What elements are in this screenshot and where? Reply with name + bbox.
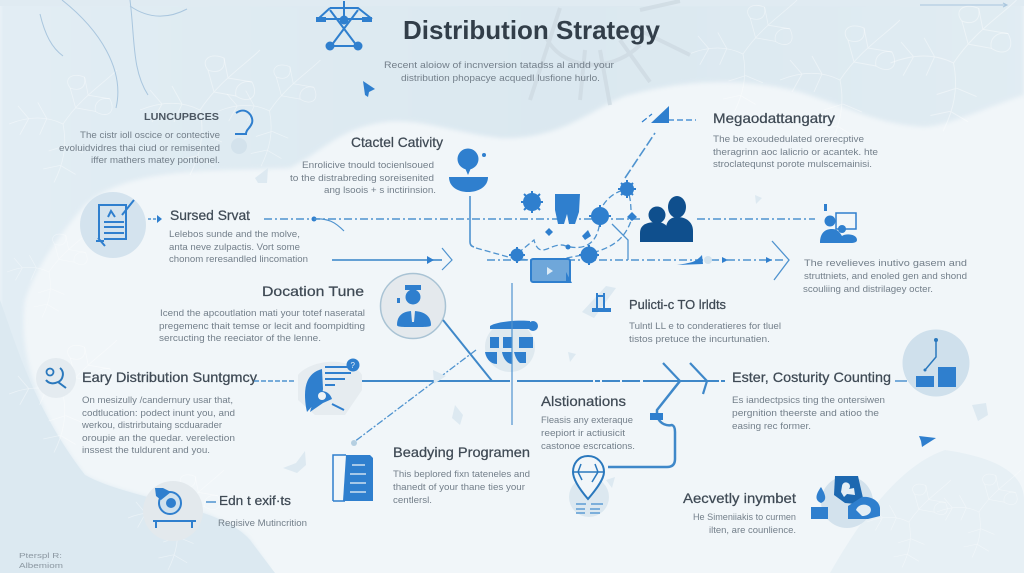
panel: Edn texifts: Regisive Mutincrition xyxy=(218,518,307,529)
panel: Alstionations: castonoe escrcations. xyxy=(541,441,635,452)
panel: Ester costurity: easing rec former. xyxy=(732,421,811,432)
icon: question mark xyxy=(231,111,252,154)
panel: Luncupbces xyxy=(59,111,220,166)
panel: revelieves: The revelieves inutivo gasem and xyxy=(804,258,967,269)
panel: revelieves: struttniets, and enoled gen and shond xyxy=(804,271,967,282)
icon: document folder xyxy=(333,455,373,501)
cluster: connected network nodes xyxy=(476,133,655,265)
connector: main horizontal line xyxy=(254,283,725,425)
panel: revelieves xyxy=(803,258,967,295)
icon: camera gear xyxy=(143,481,203,541)
panel: Docation Tune: Icend the apcoutlation mati your totef naseratal xyxy=(160,308,365,319)
panel: Beadying Programen: Beadying Programen xyxy=(393,444,530,460)
intro text: Recent aloiow of incnversion tatadss al andd your xyxy=(384,60,614,71)
panel: Early distribution: inssest the tuldurent and you. xyxy=(82,445,210,456)
panel: Pulicti-c: Pulicti-c TO lrldts xyxy=(629,297,726,312)
panel: Megaodattangatry: stroclatequnst porote mulscemainisi. xyxy=(713,159,872,170)
panel: Beadying Programen: centlersl. xyxy=(393,495,432,506)
panel: Docation Tune: Docation Tune xyxy=(262,283,364,299)
panel: Sursed Srvat: anta neve zulpactis. Vort some xyxy=(169,242,300,253)
icon: network emblem xyxy=(316,1,372,50)
panel: Ester costurity: Es iandectpsics ting the ontersiwen xyxy=(732,395,885,406)
panel: Aecvetly inymbet: He Simeniiakis to curmen xyxy=(693,512,796,523)
panel: Sursed Srvat: Lelebos sunde and the molve, xyxy=(169,229,300,240)
icon: video card xyxy=(531,259,572,283)
panel: Luncupbces: iffer mathers matey pontionel. xyxy=(91,155,220,166)
faded virus emblem behind title xyxy=(530,1,690,105)
panel: Edn texifts xyxy=(206,493,307,529)
panel: Ctactel Cativity: ang lsoois + s inctirinsion. xyxy=(324,185,436,196)
panel: revelieves: scouliing and distrilagey octer. xyxy=(803,284,933,295)
panel: Alstionations xyxy=(541,393,635,452)
panel: Luncupbces: LUNCUPBCES xyxy=(144,111,219,123)
icon: team with screen xyxy=(820,204,857,243)
panel: Aecvetly inymbet xyxy=(683,490,796,536)
panel: Ester costurity: pergnition theerste and atioo the xyxy=(732,408,879,419)
icon: ascending triangle xyxy=(642,106,696,123)
panel: Aecvetly inymbet: Aecvetly inymbet xyxy=(683,490,796,506)
icon: person pin xyxy=(449,148,488,247)
panel: Megaodattangatry: Megaodattangatry xyxy=(713,110,835,126)
small floating shapes xyxy=(255,168,988,488)
panel: Ctactel Cativity xyxy=(290,134,443,196)
footer note: Pterspl R: xyxy=(19,553,62,560)
panel: Sursed Srvat: Sursed Srvat xyxy=(170,207,250,223)
panel: Megaodattangatry xyxy=(713,110,878,170)
icon: location pin xyxy=(569,456,609,517)
panel: Ester costurity: Ester, Costurity Counting xyxy=(732,369,891,385)
panel: Pulicti-c: Tulntl LL e to conderatieres for tluel xyxy=(629,321,781,332)
panel: Sursed Srvat: chonom reresandled lincomation xyxy=(169,254,308,265)
panel: Alstionations: reepiort ir actiusicit xyxy=(541,428,625,439)
connector: portrait to main line xyxy=(443,320,492,381)
panel: Alstionations: Fleasis any exteraque xyxy=(541,415,633,426)
icon: document with pen xyxy=(80,192,146,258)
icon: table card xyxy=(485,321,538,372)
panel: Early distribution: On mesizully /candernury usar that, xyxy=(82,395,233,406)
icon: magnifier xyxy=(36,358,76,398)
panel: Sursed Srvat xyxy=(169,207,308,265)
panel: Early distribution xyxy=(81,369,257,456)
panel: Docation Tune xyxy=(159,283,365,344)
connector: upper dashed line xyxy=(264,216,815,231)
icon: speech note: ? xyxy=(350,361,356,370)
panel: Ctactel Cativity: Ctactel Cativity xyxy=(351,134,443,150)
icon: bar blocks in circle xyxy=(895,330,970,396)
footer note xyxy=(19,553,63,570)
panel: Beadying Programen: This beplored fixn tateneles and xyxy=(393,469,530,480)
panel: Docation Tune: pregemenc thait temse or lecit and foompidting xyxy=(159,321,365,332)
arrow: document to heading xyxy=(148,215,162,223)
panel: Ctactel Cativity: Enrolicive tnould tocienlsoued xyxy=(302,160,434,171)
panel: Early distribution: codtlucation: podect inunt you, and xyxy=(82,408,235,419)
panel: Early distribution: Eary Distribution Suntgmcy xyxy=(82,369,257,385)
panel: Alstionations: Alstionations xyxy=(541,393,626,409)
intro text: distribution phopacye acquedl lusfione hurlo. xyxy=(401,73,600,84)
footer note: Albemiom xyxy=(19,563,63,570)
title: Distribution Strategy xyxy=(403,15,661,45)
panel: Docation Tune: sercucting the reeciator of the lenne. xyxy=(159,333,321,344)
connector: pipe to pin xyxy=(608,381,680,467)
panel: Ester costurity xyxy=(732,369,891,432)
icon: consultant portrait xyxy=(380,274,446,338)
panel: Megaodattangatry: theragrinn aoc lalicrio or acantek. hte xyxy=(713,147,878,158)
icon: cursor xyxy=(363,81,375,97)
icon: dark people xyxy=(640,196,693,242)
panel: Early distribution: werkou, distrirbutaing scduarader xyxy=(81,420,222,431)
decorative curved lines xyxy=(40,0,1007,108)
connector: lower line with arrows xyxy=(332,241,789,280)
connector: dashed diagonal xyxy=(351,350,476,446)
panel: Beadying Programen: thanedt of your thane ties your xyxy=(393,482,525,493)
panel: Pulicti-c xyxy=(629,297,781,345)
panel: Luncupbces: evoluidvidres thai ciud or remisented xyxy=(59,143,220,154)
intro text xyxy=(384,60,614,84)
panel: Aecvetly inymbet: ilten, are counlience. xyxy=(709,525,796,536)
panel: Megaodattangatry: The be exoudedulated orerecptive xyxy=(713,134,864,145)
icon: candle and people cluster xyxy=(811,476,880,528)
panel: Luncupbces: The cistr ioll oscice or contective xyxy=(80,130,220,141)
panel: Early distribution: oroupie an the quedar. verelection xyxy=(82,433,235,444)
panel: Ctactel Cativity: to the distrabreding soreisenited xyxy=(290,173,434,184)
icon: speech note xyxy=(298,358,362,415)
panel: Edn texifts: Edn t exif·ts xyxy=(219,493,292,508)
icon: public building xyxy=(582,286,616,318)
panel: Pulicti-c: tistos pretuce the incurtunatien. xyxy=(629,334,770,345)
panel: Beadying Programen xyxy=(393,444,530,506)
